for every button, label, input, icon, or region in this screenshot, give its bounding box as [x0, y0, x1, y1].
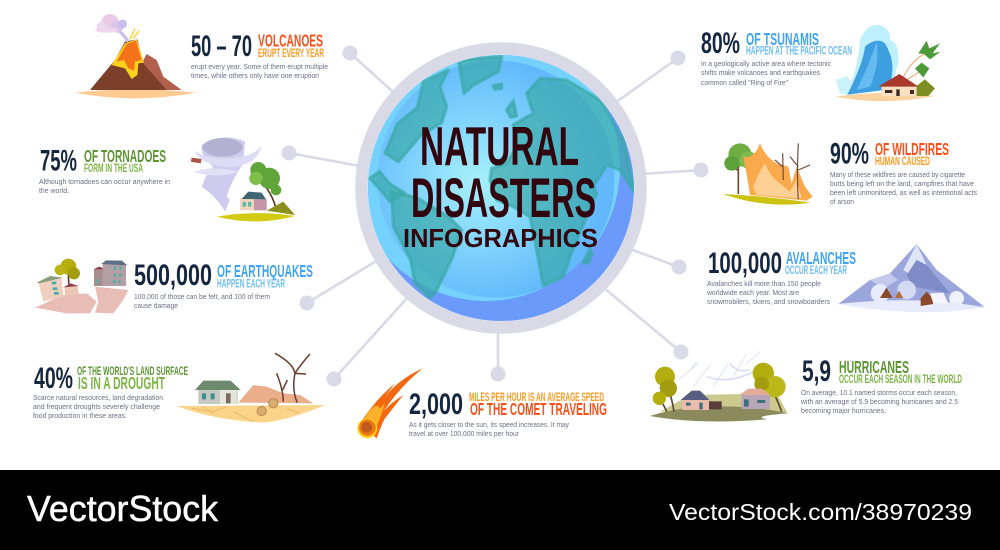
text: drought description: Scarce natural resources, land degradation: [33, 393, 163, 402]
footer bar: VectorStock: [27, 488, 219, 529]
text: volcano description: times, while others only have one eruption: [191, 71, 319, 80]
text: wildfire description: of arson: [830, 197, 854, 206]
stat: 80% tsunamis: 80%: [701, 27, 740, 60]
stat: 40% drought: [34, 362, 188, 395]
panel: earthquakes: [35, 259, 313, 313]
panel: avalanches: [706, 244, 985, 312]
icon: tornado: [191, 137, 295, 221]
icon: hurricane village: [650, 352, 788, 422]
stat: 5,9 hurricanes: [802, 355, 962, 388]
panel: drought: [33, 353, 325, 423]
stat: 5,9 hurricanes: HURRICANES: [839, 357, 909, 377]
stat: 80% tsunamis: HAPPEN AT THE PACIFIC OCEAN: [746, 44, 852, 58]
connector lines and dots: [282, 46, 708, 386]
text: tsunami description: [701, 59, 831, 87]
title: [403, 115, 598, 253]
panel: tsunamis: [701, 25, 941, 101]
stat: 40% drought: OF THE WORLD'S LAND SURFACE: [77, 364, 188, 378]
footer bar: [0, 470, 1000, 550]
text: drought description: food production in these areas.: [33, 411, 127, 420]
text: hurricane description: with an average of 5.9 becoming hurricanes and 2.5: [800, 397, 958, 406]
icon: wildfire: [723, 143, 813, 205]
text: avalanche description: worldwide each year. Most are: [706, 288, 799, 297]
stat: 5,9 hurricanes: 5,9: [802, 355, 831, 388]
stat: 75% tornadoes: 75%: [40, 144, 77, 178]
stat: 2,000 comet: [409, 388, 607, 421]
panel: wildfires: [723, 138, 977, 206]
text: avalanche description: Avalanches kill more than 150 people: [707, 279, 821, 288]
text: tsunami description: in a geologically active area where tectonic: [701, 59, 831, 68]
stat: 2,000 comet: MILES PER HOUR IS AN AVERAGE SPEED: [469, 390, 604, 404]
text: comet description: As it gets closer to the sun, its speed increases. It may: [409, 420, 569, 429]
stat: 500,000 earthquakes: HAPPEN EACH YEAR: [217, 276, 285, 290]
stat: 90% wildfires: [830, 138, 949, 170]
stat: 100,000 avalanches: OCCUR EACH YEAR: [785, 263, 847, 277]
stat: 2,000 comet: 2,000: [409, 388, 463, 421]
text: volcano description: [191, 62, 328, 80]
stat: 90% wildfires: 90%: [830, 138, 869, 170]
stat: 90% wildfires: OF WILDFIRES: [875, 139, 949, 159]
icon: comet: [357, 368, 423, 438]
text: comet description: travel at over 100,000 miles per hour: [409, 429, 519, 438]
title: NATURAL: [420, 115, 579, 177]
icon: tsunami: [835, 25, 941, 101]
icon: earthquake: [35, 259, 128, 313]
panel: hurricanes: [650, 352, 962, 422]
footer bar: VectorStock.com/38970239: [669, 499, 972, 525]
panel: tornadoes: [39, 137, 295, 221]
icon: volcano: [75, 14, 197, 98]
text: wildfire description: [830, 170, 977, 206]
stat: 2,000 comet: OF THE COMET TRAVELING: [470, 399, 607, 419]
text: hurricane description: On average, 10.1 named storms occur each season,: [801, 388, 957, 397]
stat: 50-70 volcanoes: 50 – 70: [191, 30, 252, 63]
stat: 75% tornadoes: OF TORNADOES: [84, 146, 166, 166]
stat: 40% drought: IS IN A DROUGHT: [78, 373, 165, 393]
title: DISASTERS: [411, 166, 596, 229]
stat: 90% wildfires: HUMAN CAUSED: [875, 154, 930, 168]
text: hurricane description: [800, 388, 958, 415]
text: drought description: [33, 393, 163, 420]
text: tsunami description: shifts make volcanoes and earthquakes: [701, 68, 820, 77]
stat: 100,000 avalanches: 100,000: [708, 247, 782, 280]
stat: 500,000 earthquakes: 500,000: [134, 259, 212, 292]
stat: 100,000 avalanches: AVALANCHES: [786, 248, 856, 268]
stat: 50-70 volcanoes: VOLCANOES: [258, 30, 323, 50]
text: comet description: [409, 420, 569, 438]
text: wildfire description: Many of these wildfires are caused by cigarette: [830, 170, 965, 179]
stat: 75% tornadoes: FORM IN THE USA: [84, 161, 143, 175]
stat: 500,000 earthquakes: OF EARTHQUAKES: [217, 261, 313, 281]
panel: volcanoes: [75, 14, 328, 98]
stat: 80% tsunamis: [701, 27, 852, 60]
text: earthquake description: cause damage: [134, 301, 178, 310]
title: INFOGRAPHICS: [403, 223, 598, 253]
text: tsunami description: common called "Ring of Fire": [701, 78, 788, 87]
stat: 75% tornadoes: [40, 144, 166, 178]
text: tornado description: [39, 177, 170, 195]
text: earthquake description: [134, 292, 270, 310]
text: avalanche description: snowmobilers, skiers, and snowboarders: [707, 297, 830, 306]
text: tornado description: the world.: [39, 186, 69, 195]
text: earthquake description: 100,000 of those can be felt, and 100 of them: [134, 292, 270, 301]
text: wildfire description: been left unmonitored, as well as intentional acts: [830, 188, 977, 197]
text: avalanche description: [706, 279, 830, 306]
icon: drought: [177, 353, 325, 423]
icon: avalanche mountain: [838, 244, 985, 312]
text: volcano description: erupt every year. Some of them erupt multiple: [191, 62, 328, 71]
text: hurricane description: becoming major hurricanes.: [801, 406, 886, 415]
text: tornado description: Although tornadoes can occur anywhere in: [39, 177, 170, 186]
panel: comet: [357, 368, 607, 438]
stat: 40% drought: 40%: [34, 362, 73, 395]
stat: 500,000 earthquakes: [134, 259, 313, 292]
globe: [352, 33, 640, 328]
text: drought description: and frequent droughts severely challenge: [33, 402, 160, 411]
stat: 50-70 volcanoes: ERUPT EVERY YEAR: [258, 46, 324, 60]
text: wildfire description: butts being left on the land, campfires that have: [830, 179, 974, 188]
stat: 80% tsunamis: OF TSUNAMIS: [746, 29, 819, 49]
